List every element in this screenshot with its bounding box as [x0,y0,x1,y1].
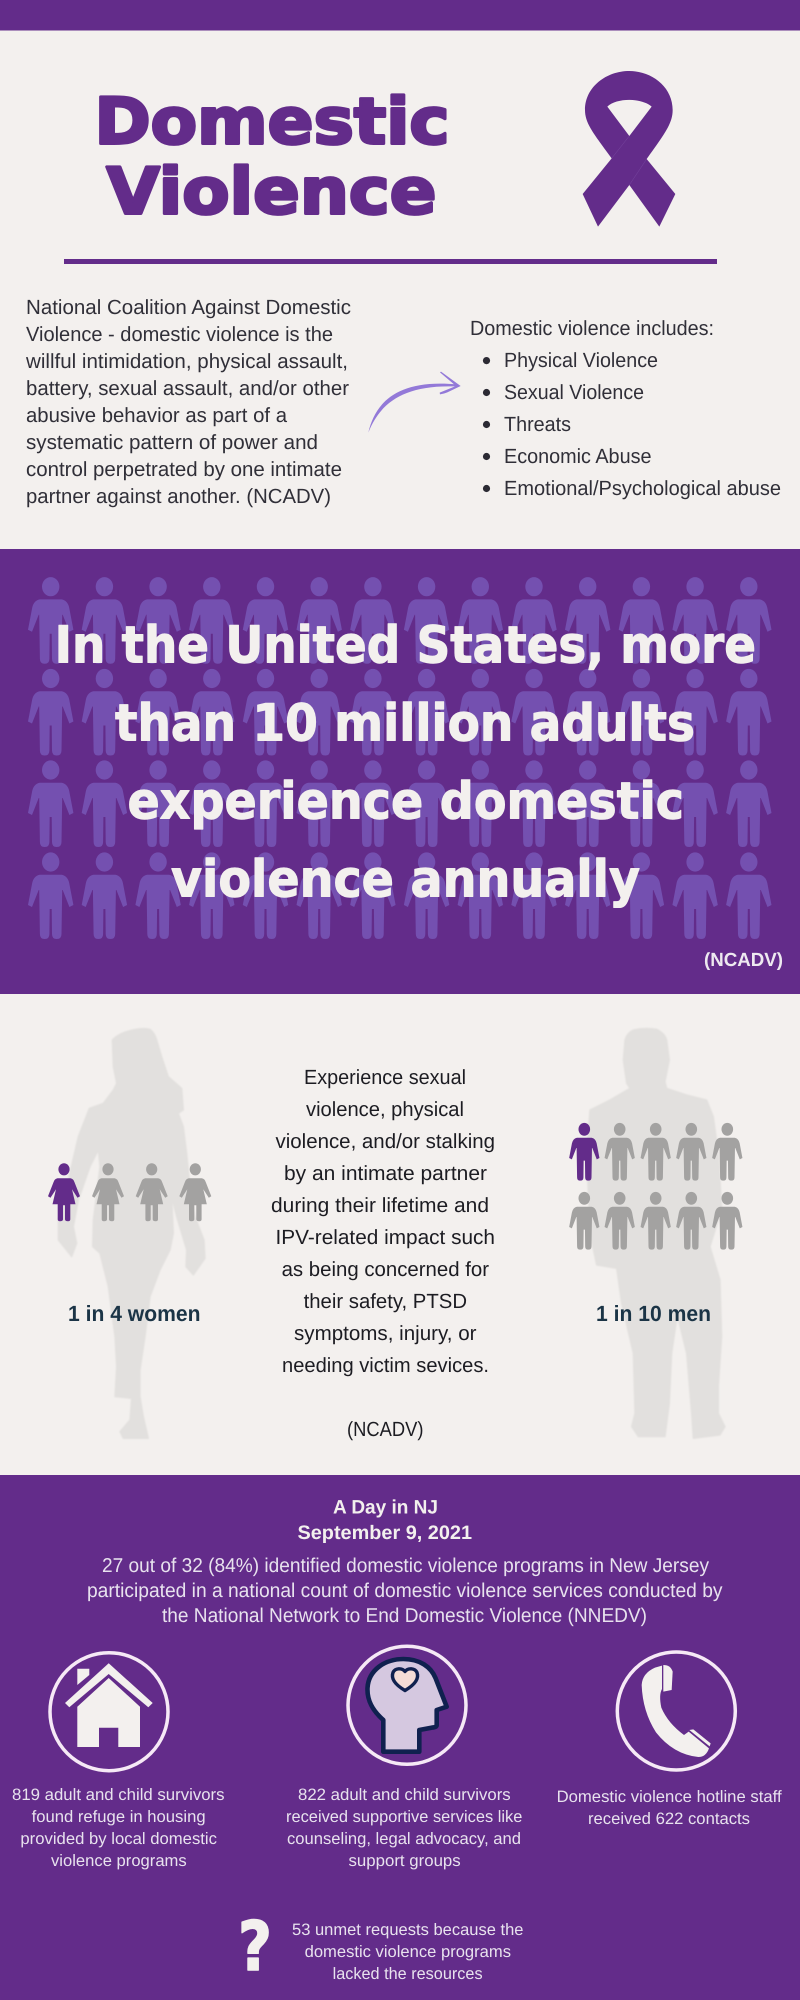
man silhouette [587,1028,725,1438]
caption: unmet requests: lacked the resources [333,1965,483,1983]
center text block: Experience sexual [304,1066,466,1089]
center text block [271,1066,495,1441]
panel: a day in NJ [0,1475,800,2000]
caption: unmet requests [292,1921,524,1983]
definition paragraph: battery, sexual assault, and/or other [26,377,349,400]
caption: supportive services: support groups [348,1852,461,1870]
center text block: by an intimate partner [284,1162,487,1185]
caption: supportive services [286,1786,522,1870]
list: domestic violence includes: Threats [504,413,571,436]
caption: supportive services: received supportive services like [286,1808,522,1826]
list: domestic violence includes: Physical Violence [504,349,658,372]
caption: unmet requests: 53 unmet requests because the [292,1921,524,1939]
list: domestic violence includes [470,317,781,500]
icon: telephone [617,1652,735,1770]
caption: housing [12,1786,224,1870]
intro text: 27 out of 32 (84%) identified domestic violence programs in New Jersey [102,1555,709,1577]
intro text [87,1555,722,1627]
center text block: (NCADV) [347,1418,424,1441]
panel: national statistic banner [0,549,800,994]
headline statistic: than 10 million adults [115,695,695,754]
headline statistic: In the United States, more [55,617,756,676]
list: domestic violence includes: Economic Abuse [504,445,652,468]
caption: supportive services: 822 adult and child survivors [298,1786,511,1804]
panel: women [48,1029,211,1438]
pictogram: 1 in 4 women [48,1163,211,1221]
center text block: needing victim sevices. [282,1354,489,1377]
top bar [0,0,800,30]
pictogram: 1 in 10 men [569,1123,742,1250]
section heading: September 9, 2021 [298,1522,472,1544]
panel: men [569,1028,742,1438]
icon: awareness ribbon [583,71,675,227]
caption: hotline [557,1788,782,1828]
center text block: IPV-related impact such [276,1226,495,1249]
definition paragraph [25,296,351,508]
caption: unmet requests: domestic violence programs [305,1943,511,1961]
caption: hotline: received 622 contacts [588,1810,750,1828]
people pattern [28,577,772,939]
list: domestic violence includes: Domestic violence includes: [470,317,714,340]
section heading [298,1496,472,1544]
center text block: as being concerned for [282,1258,489,1281]
headline statistic: experience domestic [128,773,684,832]
caption: housing: found refuge in housing [32,1808,206,1826]
caption: housing: provided by local domestic [20,1830,217,1848]
headline statistic [55,617,756,910]
headline statistic: violence annually [171,851,640,910]
label: 1 in 10 men: 1 in 10 men [596,1301,711,1326]
center text block: symptoms, injury, or [294,1322,477,1345]
source: (NCADV) [704,950,783,971]
caption: supportive services: counseling, legal advocacy, and [287,1830,521,1848]
center text block: their safety, PTSD [304,1290,467,1313]
icon: question mark: ? [238,1908,272,1987]
center text block: violence, physical [306,1098,464,1121]
woman silhouette [58,1029,205,1438]
center text block: violence, and/or stalking [276,1130,495,1153]
intro text: participated in a national count of domestic violence services conducted by [87,1580,722,1602]
list: domestic violence includes: Sexual Violence [504,381,644,404]
icon: head with heart [348,1646,466,1764]
title: Violence [106,156,436,230]
definition paragraph: willful intimidation, physical assault, [25,350,348,373]
title: Domestic [94,86,450,160]
caption: hotline: Domestic violence hotline staff [557,1788,782,1806]
definition paragraph: control perpetrated by one intimate [26,458,342,481]
center text block: during their lifetime and [271,1194,489,1217]
caption: housing: violence programs [51,1852,187,1870]
arrow [368,372,461,433]
definition paragraph: National Coalition Against Domestic [26,296,351,319]
definition paragraph: systematic pattern of power and [26,431,318,454]
title [94,86,450,230]
definition paragraph: Violence - domestic violence is the [26,323,333,346]
label: 1 in 4 women: 1 in 4 women [68,1301,200,1326]
list: domestic violence includes: Emotional/Psychological abuse [504,477,781,500]
definition paragraph: partner against another. (NCADV) [26,485,331,508]
intro text: the National Network to End Domestic Violence (NNEDV) [162,1605,647,1627]
definition paragraph: abusive behavior as part of a [26,404,288,427]
caption: housing: 819 adult and child survivors [12,1786,224,1804]
divider [64,259,717,264]
icon: house [50,1653,168,1771]
section heading: A Day in NJ [333,1496,438,1518]
